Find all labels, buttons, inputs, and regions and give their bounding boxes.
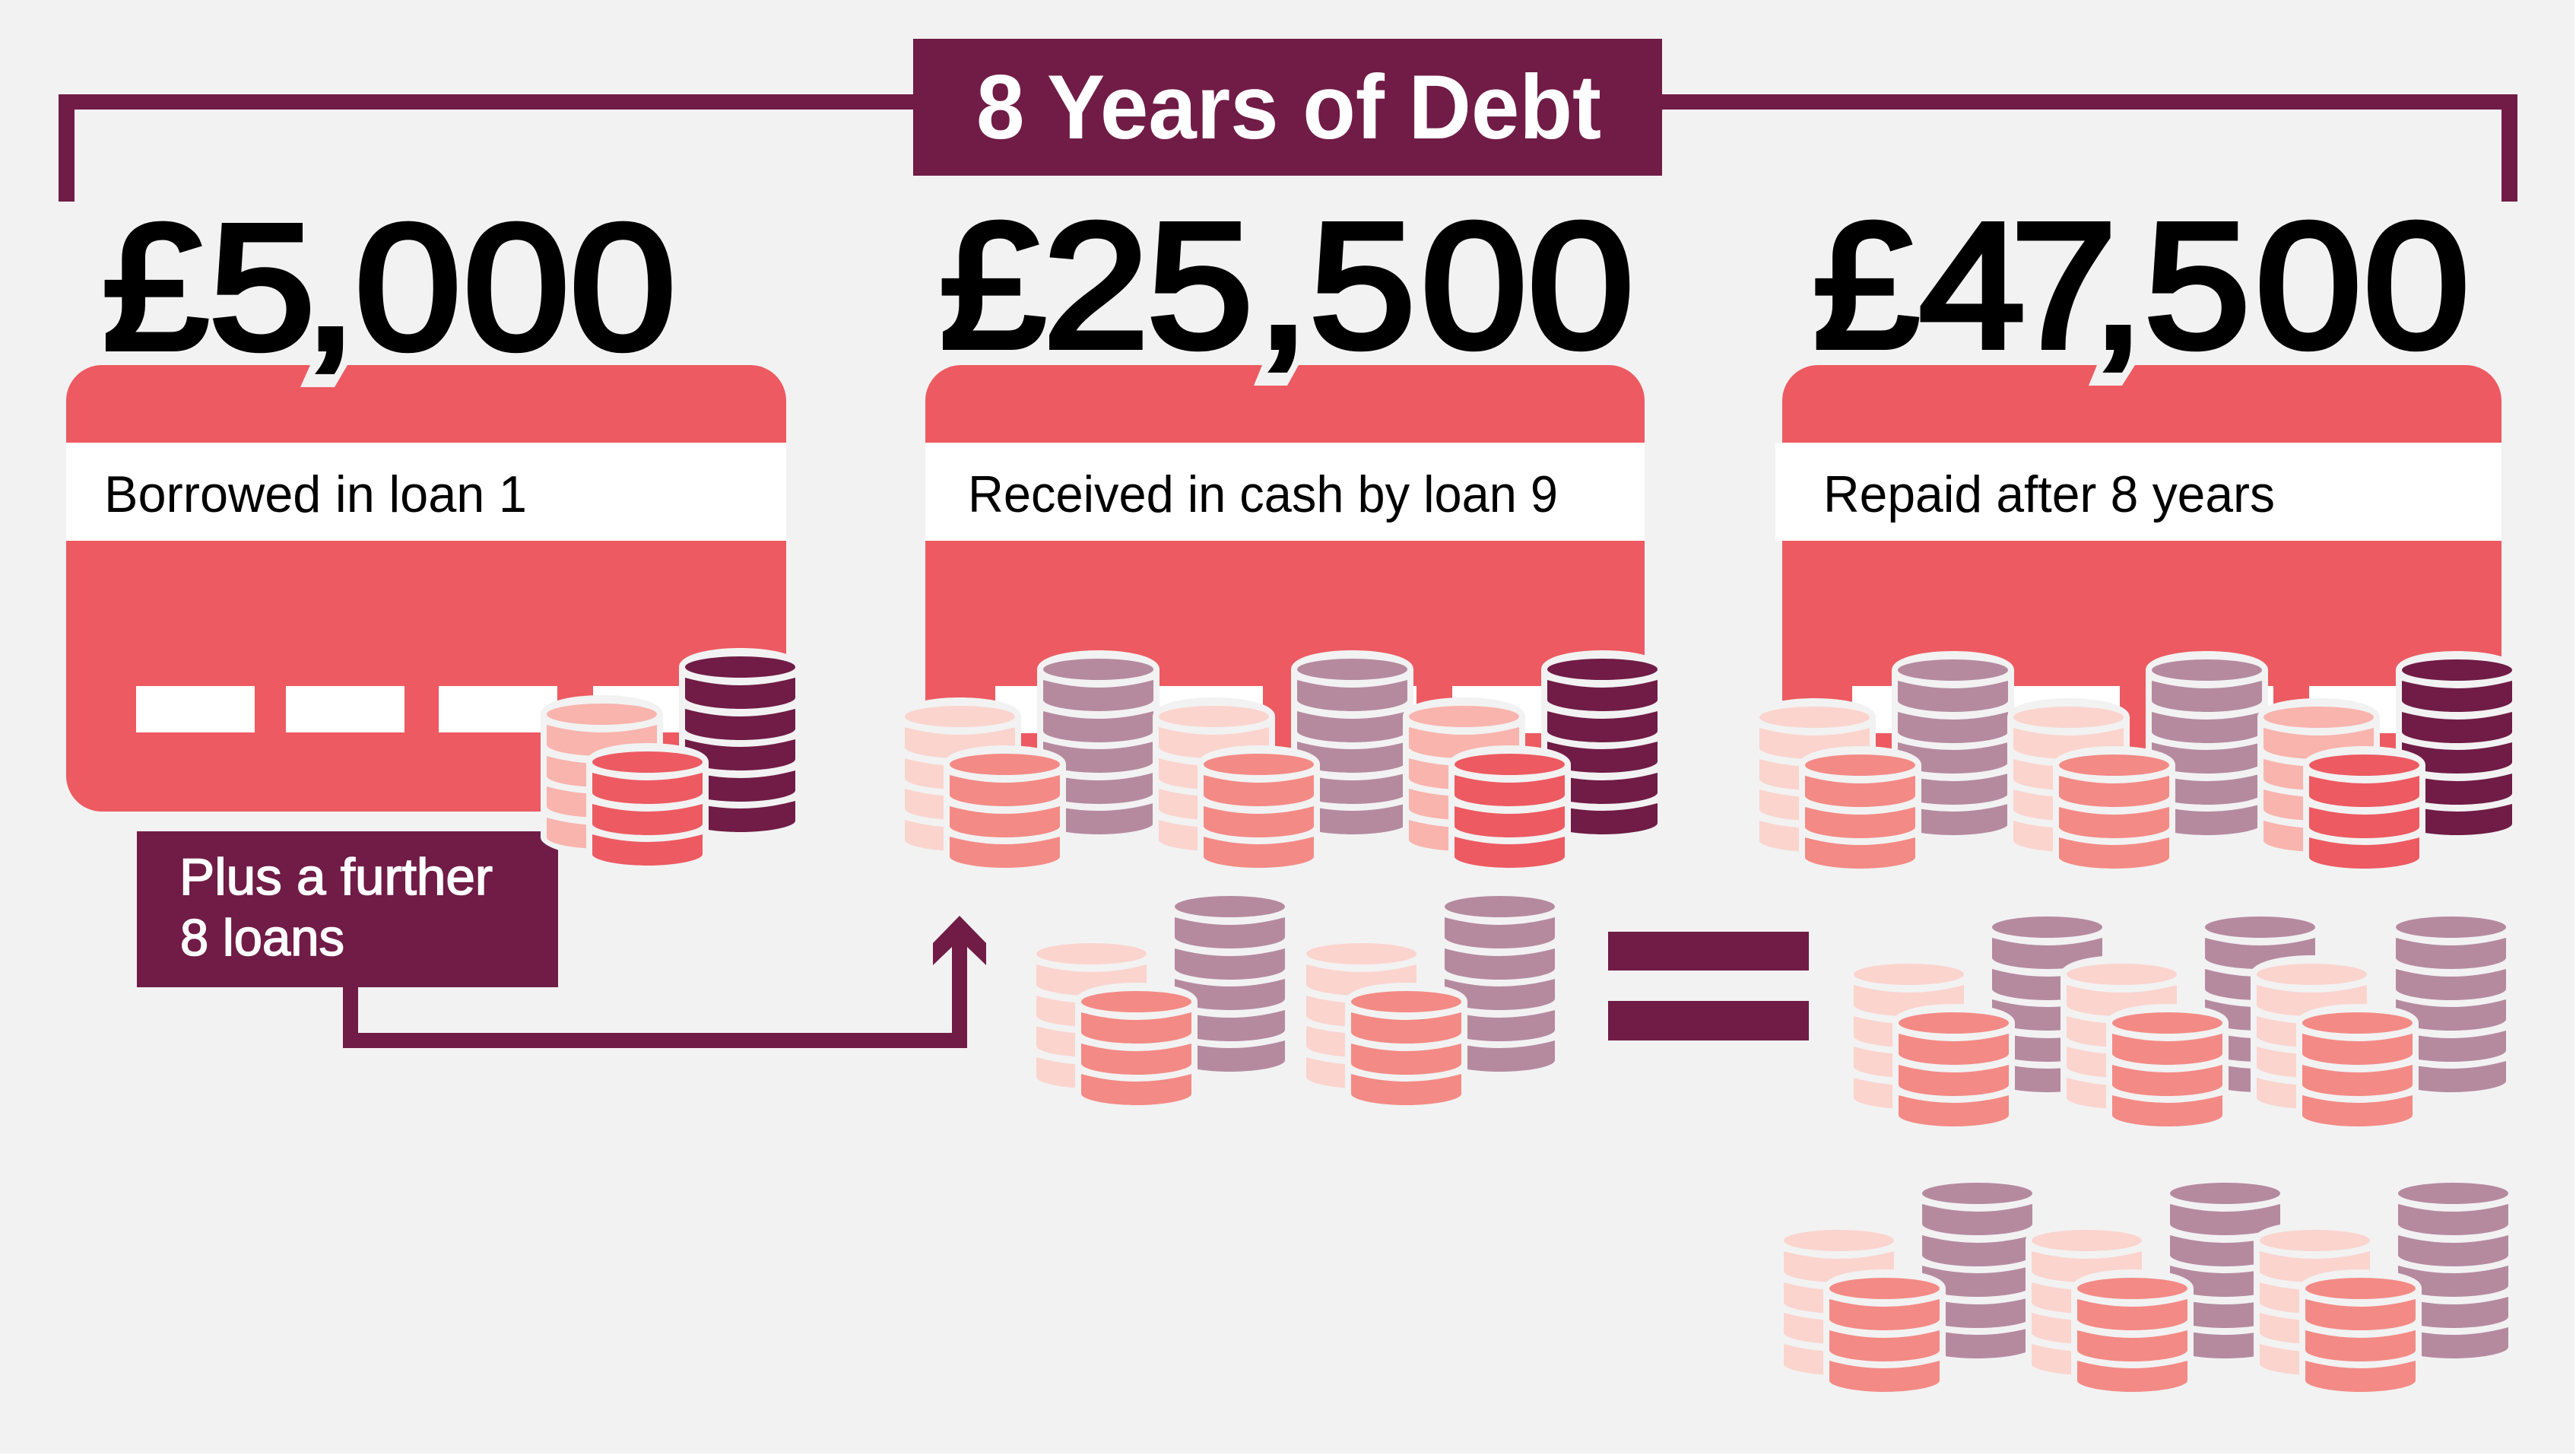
panel: card 1, borrowed in loan 1 — [66, 365, 786, 812]
label: repaid after 8 years: Repaid after 8 years — [1823, 465, 2275, 523]
icon: coin stacks, further loans — [1030, 888, 1561, 1113]
label: borrowed in loan 1: Borrowed in loan 1 — [104, 465, 527, 523]
icon: coin stacks on card 1 — [541, 648, 801, 873]
callout text line 2: 8 loans — [180, 909, 344, 967]
icon: coin stacks, total row 2 — [1778, 1174, 2514, 1399]
title banner — [913, 39, 1662, 176]
callout: plus a further 8 loans — [137, 831, 558, 987]
arrow: from callout up to loan 9 — [343, 916, 986, 1048]
amount: £5,000: £5,000 — [103, 188, 676, 386]
icon: coin stacks, total row 1 — [1848, 908, 2512, 1134]
icon: coin stacks on card 2 — [899, 650, 1664, 875]
label: received in cash by loan 9: Received in cash by loan 9 — [968, 465, 1558, 523]
panel: card 3, repaid after 8 years — [1775, 365, 2501, 812]
callout text line 1: Plus a further — [179, 848, 493, 906]
title text: 8 Years of Debt — [976, 56, 1601, 158]
amount: £25,500: £25,500 — [940, 186, 1634, 385]
amount: £47,500: £47,500 — [1813, 186, 2470, 385]
panel: card 2, received in cash by loan 9 — [925, 365, 1645, 812]
equals sign — [1608, 932, 1809, 1040]
icon: coin stacks on card 3 — [1753, 651, 2518, 876]
top bracket — [59, 94, 2517, 202]
